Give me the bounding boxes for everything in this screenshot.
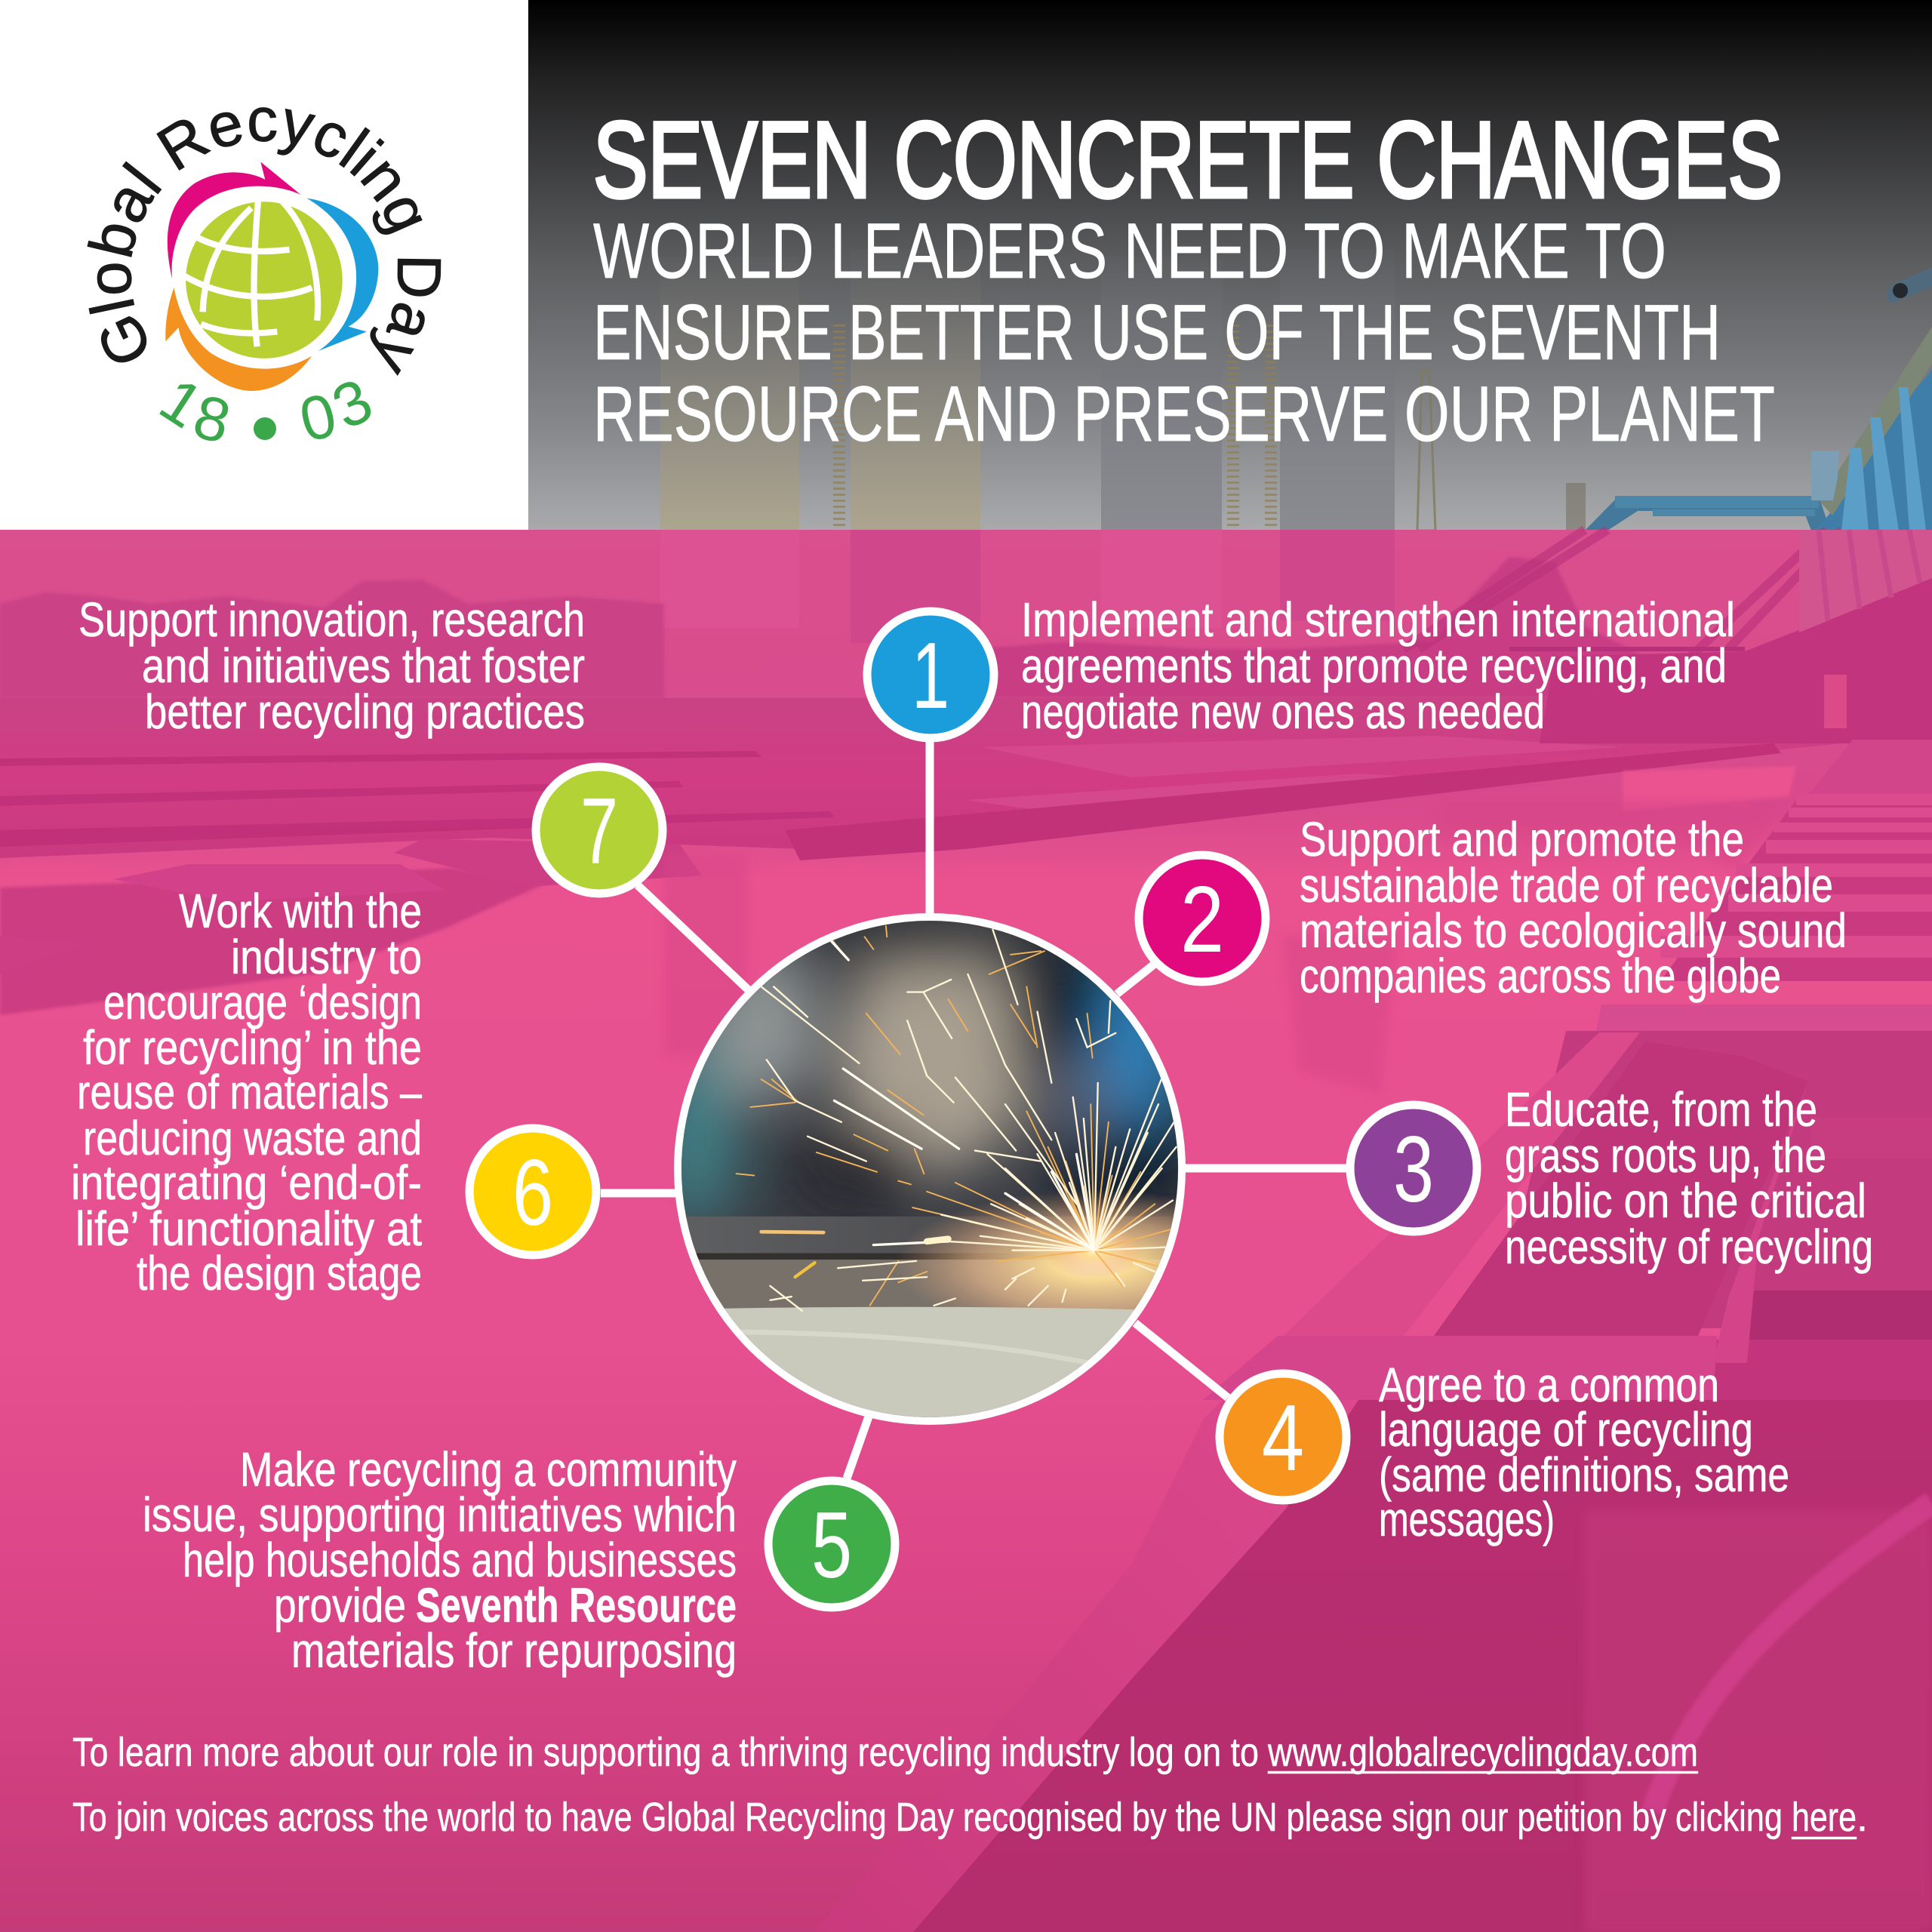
footer text with links: To learn more about our role in supporting a thriving recycling industry log on to <box>72 1730 1259 1775</box>
step 5 circle: 5 <box>811 1494 852 1598</box>
text: step 7 <box>78 592 585 739</box>
step 5 circle <box>768 1481 895 1607</box>
step 1 circle <box>867 611 994 738</box>
text: step 5: Make recycling a community <box>240 1442 737 1497</box>
logo date: 18 03: 8 <box>187 382 237 457</box>
title <box>593 100 1783 458</box>
text: step 3: grass roots up, the <box>1505 1128 1826 1183</box>
text: step 2: companies across the globe <box>1300 949 1781 1003</box>
text: step 6 <box>71 884 422 1300</box>
text: step 2 <box>1300 812 1847 1003</box>
text: step 3: Educate, from the <box>1505 1082 1817 1137</box>
logo date: 18 03: 1 <box>148 365 214 441</box>
text: step 1: agreements that promote recycling, and <box>1021 638 1727 693</box>
logo: Global Recycling Day 18.03 <box>88 107 441 457</box>
logo panel: white <box>0 0 528 530</box>
step 2 circle: 2 <box>1180 868 1224 972</box>
text: step 3 <box>1505 1082 1873 1274</box>
step 1 circle: 1 <box>912 624 949 728</box>
step 4 circle: 4 <box>1262 1386 1304 1491</box>
pink background panel with tinted plant photo <box>0 530 1932 1932</box>
logo date: 18 03: 0 <box>293 380 343 455</box>
text: step 5 <box>143 1442 737 1678</box>
step 4 circle <box>1220 1374 1346 1500</box>
text: step 5: Seventh Resource <box>416 1578 737 1632</box>
text: step 6: reducing waste and <box>83 1111 422 1165</box>
text: step 4: Agree to a common <box>1379 1358 1719 1412</box>
text: step 7: and initiatives that foster <box>142 638 585 693</box>
text: step 6: Work with the <box>179 884 422 938</box>
text: step 6: industry to <box>231 930 422 984</box>
logo icon: recycling arrows and globe <box>165 162 378 391</box>
text: step 3: public on the critical <box>1505 1174 1866 1228</box>
step 3 circle <box>1350 1105 1477 1232</box>
text: step 4: (same definitions, same <box>1379 1447 1789 1502</box>
step 6 circle <box>469 1128 596 1255</box>
step 7 circle <box>536 767 663 894</box>
text: step 6: for recycling’ in the <box>83 1020 422 1075</box>
text: step 6: encourage ‘design <box>103 975 422 1029</box>
text: step 6: the design stage <box>137 1246 422 1300</box>
connector lines from centre photo to numbered circles <box>601 740 1346 1478</box>
text: step 2: Support and promote the <box>1300 812 1744 866</box>
text: step 4: language of recycling <box>1379 1402 1753 1457</box>
text: step 7: Support innovation, research <box>78 592 585 647</box>
logo date: 18 03: 3 <box>322 366 383 442</box>
footer text with links: . <box>1857 1795 1868 1840</box>
text: step 1 <box>1021 592 1735 739</box>
text: step 7: better recycling practices <box>145 685 585 739</box>
text: step 5: issue, supporting initiatives which <box>143 1487 737 1542</box>
step 2 circle <box>1139 855 1266 982</box>
step 7 circle: 7 <box>580 780 618 884</box>
footer text with links <box>72 1730 1868 1840</box>
step 6 circle: 6 <box>512 1141 553 1245</box>
step 3 circle: 3 <box>1393 1118 1434 1222</box>
text: step 5: provide <box>274 1578 406 1632</box>
header photo: industrial silos under dark sky <box>528 0 1932 531</box>
text: step 6: life’ functionality at <box>75 1201 422 1256</box>
footer text with links: here <box>1792 1795 1857 1840</box>
text: step 5: materials for repurposing <box>291 1623 737 1678</box>
subheading <box>593 208 1775 458</box>
logo date: 18 03 <box>148 365 383 457</box>
centre photo: welding sparks <box>674 913 1186 1425</box>
logo wordmark: Global Recycling Day <box>88 107 441 376</box>
text: step 6: integrating ‘end-of- <box>71 1155 422 1210</box>
footer text with links: www.globalrecyclingday.com <box>1267 1730 1698 1775</box>
text: step 4: messages) <box>1379 1492 1555 1546</box>
text: step 5: help households and businesses <box>183 1533 737 1587</box>
text: step 1: Implement and strengthen international <box>1021 592 1735 647</box>
text: step 4 <box>1379 1358 1789 1546</box>
text: step 6: reuse of materials – <box>77 1065 422 1119</box>
text: step 1: negotiate new ones as needed <box>1021 685 1545 739</box>
